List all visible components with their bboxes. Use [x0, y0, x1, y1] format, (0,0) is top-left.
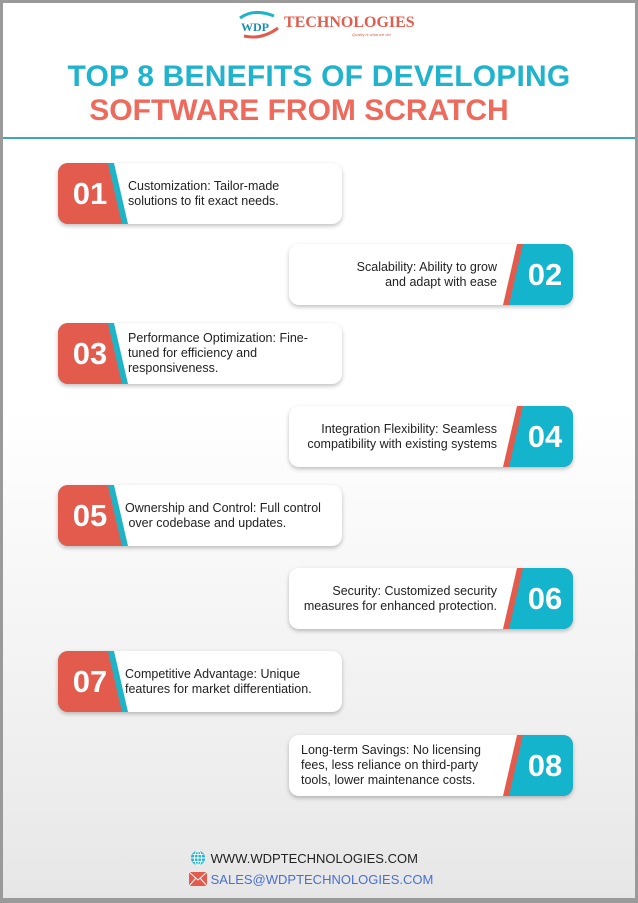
- card 06: measures for enhanced protection.: [304, 598, 497, 612]
- card 03: 03: [73, 336, 107, 371]
- card 05: Ownership and Control: Full control: [125, 500, 321, 514]
- card 07: features for market differentiation.: [125, 682, 312, 696]
- logo: Quality is what we do!: [352, 32, 391, 37]
- logo: WDP: [241, 20, 269, 34]
- card 07: [58, 651, 342, 712]
- logo: TECHNOLOGIES: [284, 14, 415, 31]
- card 01: solutions to fit exact needs.: [128, 194, 279, 208]
- card 05: [58, 485, 342, 546]
- card 07: 07: [73, 664, 107, 699]
- card 03: Performance Optimization: Fine-: [128, 331, 308, 345]
- card 02: Scalability: Ability to grow: [357, 260, 497, 274]
- card 04: 04: [528, 419, 562, 454]
- card 01: [58, 163, 342, 224]
- card 03: [58, 323, 342, 384]
- title: SOFTWARE FROM SCRATCH: [89, 94, 509, 127]
- footer contacts: SALES@WDPTECHNOLOGIES.COM: [211, 872, 433, 887]
- card 06: Security: Customized security: [332, 584, 497, 598]
- card 08: tools, lower maintenance costs.: [301, 773, 475, 787]
- title: TOP 8 BENEFITS OF DEVELOPING: [68, 60, 570, 93]
- card 02: and adapt with ease: [385, 274, 497, 288]
- card 03: tuned for efficiency and: [128, 346, 257, 360]
- card 05: over codebase and updates.: [128, 516, 286, 530]
- card 01: Customization: Tailor-made: [128, 178, 279, 192]
- card 05: 05: [73, 498, 107, 533]
- card 04: compatibility with existing systems: [307, 436, 497, 450]
- card 07: Competitive Advantage: Unique: [125, 666, 300, 680]
- card 04: Integration Flexibility: Seamless: [321, 422, 497, 436]
- card 03: responsiveness.: [128, 361, 218, 375]
- logo: [239, 10, 415, 38]
- card 01: 01: [73, 176, 107, 211]
- card 06: [289, 568, 573, 629]
- footer contacts: [189, 850, 433, 887]
- card 08: 08: [528, 748, 562, 783]
- card 02: 02: [528, 257, 562, 292]
- card 06: 06: [528, 581, 562, 616]
- card 08: fees, less reliance on third-party: [301, 758, 478, 772]
- title: [68, 60, 570, 127]
- card 04: [289, 406, 573, 467]
- footer contacts: WWW.WDPTECHNOLOGIES.COM: [211, 851, 418, 866]
- card 08: Long-term Savings: No licensing: [301, 743, 481, 757]
- card 02: [289, 244, 573, 305]
- card 08: [289, 735, 573, 796]
